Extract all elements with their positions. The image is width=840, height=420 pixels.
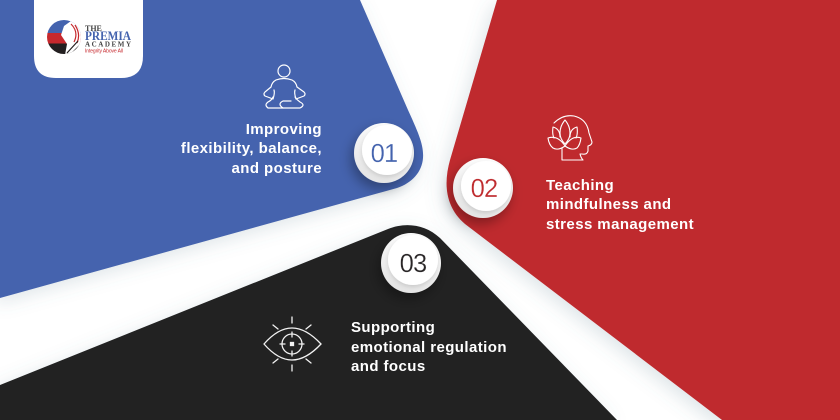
badge: 03: 03 bbox=[400, 250, 427, 278]
text: teaching mindfulness: mindfulness and bbox=[546, 196, 671, 213]
text: teaching mindfulness: stress management bbox=[546, 216, 694, 233]
icon: head with lotus bbox=[548, 116, 592, 160]
text: improving flexibility bbox=[181, 121, 322, 177]
text: improving flexibility: Improving bbox=[246, 121, 322, 138]
text: logo wordmark: ACADEMY bbox=[85, 40, 131, 48]
icon: logo emblem bbox=[47, 20, 83, 55]
text: supporting emotional regulation: emotional regulation bbox=[351, 339, 507, 356]
badge: 02 bbox=[453, 158, 513, 218]
icon: meditation figure bbox=[264, 65, 305, 108]
text: logo wordmark: THE bbox=[85, 24, 102, 33]
panel: improving flexibility bbox=[0, 0, 423, 298]
text: supporting emotional regulation bbox=[351, 319, 507, 375]
panel: supporting emotional regulation bbox=[0, 225, 617, 420]
text: teaching mindfulness: Teaching bbox=[546, 177, 614, 194]
text: improving flexibility: and posture bbox=[232, 160, 322, 177]
icon: eye with target bbox=[264, 317, 321, 371]
text: logo wordmark: Integrity Above All bbox=[85, 48, 123, 54]
text: supporting emotional regulation: Supporting bbox=[351, 319, 435, 336]
text: teaching mindfulness bbox=[546, 177, 694, 233]
badge: 01 bbox=[354, 123, 414, 183]
badge: 03 bbox=[381, 233, 441, 293]
logo card bbox=[34, 0, 143, 78]
badge: 01: 01 bbox=[371, 140, 397, 168]
text: improving flexibility: flexibility, balance, bbox=[181, 140, 322, 157]
panel: teaching mindfulness bbox=[447, 0, 840, 420]
badge: 02: 02 bbox=[471, 175, 497, 203]
text: logo wordmark: PREMIA bbox=[85, 28, 132, 43]
text: logo wordmark bbox=[85, 24, 132, 54]
text: supporting emotional regulation: and focus bbox=[351, 358, 426, 375]
